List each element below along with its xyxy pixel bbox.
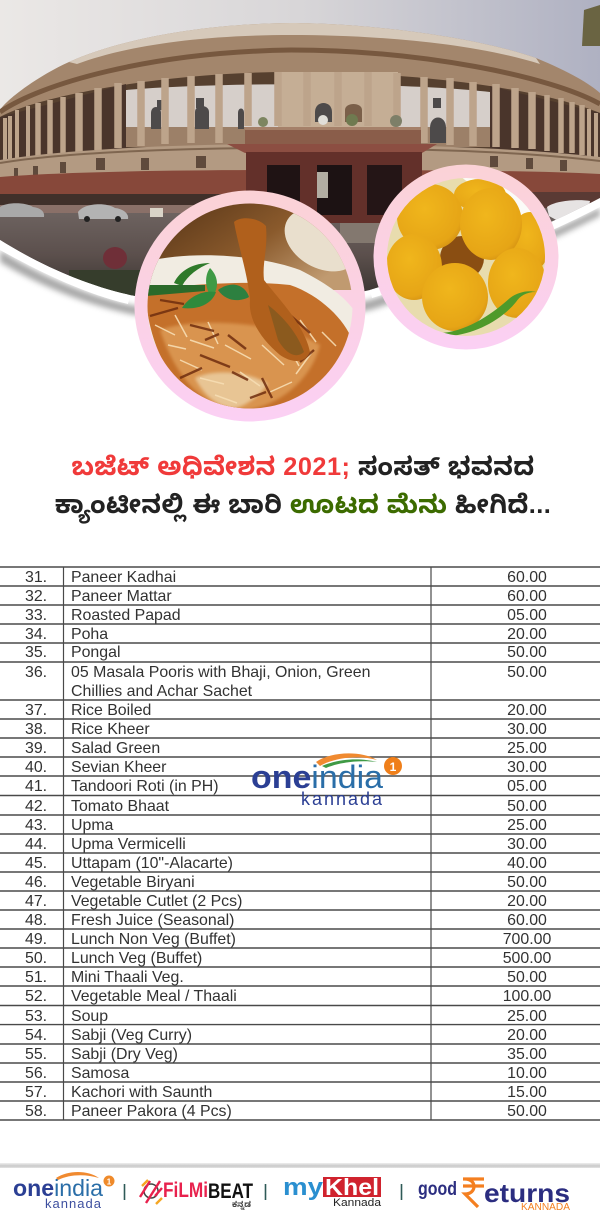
roadside sign	[150, 208, 163, 217]
chilli	[174, 263, 210, 286]
bowl background	[148, 204, 352, 290]
title line 2: ಕ್ಯಾಂಟೀನಲ್ಲಿ ಈ ಬಾರಿ ಊಟದ ಮೆನು ಹೀಗಿದೆ...	[55, 491, 551, 524]
serial numbers: 49.	[25, 931, 47, 948]
prices: 20.00	[507, 702, 547, 719]
title	[55, 453, 551, 524]
prices: 05.00	[507, 607, 547, 624]
tree top right	[582, 5, 600, 46]
chilli	[440, 291, 536, 336]
item names: Soup	[71, 1008, 108, 1025]
prices: 50.00	[507, 1103, 547, 1120]
menu price table	[0, 567, 600, 1120]
serial numbers: 54.	[25, 1027, 47, 1044]
prices: 20.00	[507, 893, 547, 910]
red sandstone base	[0, 170, 600, 208]
ground slab	[340, 223, 380, 243]
item names: Sabji (Dry Veg)	[71, 1046, 178, 1063]
serial numbers: 44.	[25, 836, 47, 853]
prices: 50.00	[507, 644, 547, 661]
serial numbers: 31.	[25, 569, 47, 586]
colonnade wall	[126, 84, 490, 128]
serial numbers: 46.	[25, 874, 47, 891]
prices: 15.00	[507, 1084, 547, 1101]
prices: 100.00	[503, 988, 551, 1005]
grass corner	[69, 270, 140, 296]
cornice and plinth	[0, 144, 600, 178]
prices: 50.00	[507, 969, 547, 986]
item names: Samosa	[71, 1065, 129, 1082]
item names: Lunch Veg (Buffet)	[71, 950, 202, 967]
serial numbers: 47.	[25, 893, 47, 910]
serial numbers: 33.	[25, 607, 47, 624]
prices: 30.00	[507, 721, 547, 738]
footer separators	[124, 1184, 402, 1200]
serial numbers: 55.	[25, 1046, 47, 1063]
footer bar	[0, 1163, 600, 1168]
prices: 20.00	[507, 1027, 547, 1044]
prices: 30.00	[507, 759, 547, 776]
balcony plants	[258, 117, 268, 127]
prices: 60.00	[507, 912, 547, 929]
item names: Salad Green	[71, 740, 160, 757]
serial numbers: 38.	[25, 721, 47, 738]
footer logo: mykhel: my	[283, 1174, 324, 1201]
footer logo: goodreturns: good	[418, 1179, 457, 1200]
colonnade columns	[5, 72, 596, 160]
serial numbers: 48.	[25, 912, 47, 929]
plate	[386, 177, 546, 337]
item names: Paneer Pakora (4 Pcs)	[71, 1103, 232, 1120]
rice strands	[155, 315, 336, 403]
sky	[0, 0, 600, 240]
photo: biryani circle	[134, 190, 371, 422]
serial numbers: 58.	[25, 1103, 47, 1120]
footer logo: oneindia	[13, 1172, 114, 1211]
serial numbers: 35.	[25, 644, 47, 661]
table grid	[0, 567, 600, 1120]
car left	[0, 203, 44, 217]
serial numbers: 39.	[25, 740, 47, 757]
prices: 10.00	[507, 1065, 547, 1082]
photo: bonda circle	[374, 164, 558, 350]
item names: Rice Kheer	[71, 721, 150, 738]
footer logo: filmibeat	[140, 1179, 253, 1211]
item names	[71, 569, 370, 1120]
item names: Fresh Juice (Seasonal)	[71, 912, 234, 929]
footer logo: filmibeat: BEAT	[208, 1180, 253, 1203]
side bowl	[284, 213, 346, 272]
item names: Tandoori Roti (in PH)	[71, 778, 218, 795]
prices: 500.00	[503, 950, 551, 967]
prices: 35.00	[507, 1046, 547, 1063]
footer logo: oneindia: 1	[107, 1178, 112, 1186]
watermark: oneindia kannada: oneindia	[251, 759, 383, 795]
prices: 40.00	[507, 855, 547, 872]
item names: Chillies and Achar Sachet	[71, 683, 253, 700]
item names: Pongal	[71, 644, 120, 661]
prices: 20.00	[507, 626, 547, 643]
car right	[547, 200, 590, 222]
prices: 25.00	[507, 740, 547, 757]
footer logo: mykhel	[283, 1174, 382, 1209]
hero: parliament photo	[0, 0, 600, 322]
footer logo: goodreturns: KANNADA	[521, 1202, 570, 1213]
item names: Sabji (Veg Curry)	[71, 1027, 192, 1044]
prices: 50.00	[507, 874, 547, 891]
serial numbers: 50.	[25, 950, 47, 967]
mint leaves	[206, 268, 217, 292]
footer logo: mykhel: Kannada	[333, 1197, 382, 1209]
item names: Paneer Mattar	[71, 588, 172, 605]
serial numbers: 40.	[25, 759, 47, 776]
prices: 50.00	[507, 798, 547, 815]
serial numbers	[25, 569, 47, 1120]
planter	[103, 247, 127, 269]
item names: Lunch Non Veg (Buffet)	[71, 931, 236, 948]
item names: Vegetable Cutlet (2 Pcs)	[71, 893, 242, 910]
white swoosh band	[0, 198, 600, 304]
footer logo: oneindia: kannada	[45, 1196, 102, 1211]
serial numbers: 51.	[25, 969, 47, 986]
watermark: oneindia kannada: kannada	[301, 789, 383, 809]
item names: Poha	[71, 626, 108, 643]
serial numbers: 56.	[25, 1065, 47, 1082]
serial numbers: 34.	[25, 626, 47, 643]
serial numbers: 42.	[25, 798, 47, 815]
serial numbers: 43.	[25, 817, 47, 834]
central bay	[278, 72, 398, 128]
chicken leg	[234, 218, 310, 361]
item names: Upma	[71, 817, 114, 834]
item names: Kachori with Saunth	[71, 1084, 212, 1101]
hedges and crowd	[0, 194, 228, 205]
item names: Tomato Bhaat	[71, 798, 170, 815]
item names: Upma Vermicelli	[71, 836, 186, 853]
item names: 05 Masala Pooris with Bhaji, Onion, Green	[71, 664, 370, 681]
central porch	[227, 114, 437, 223]
watermark: oneindia kannada	[251, 753, 402, 809]
item names: Vegetable Meal / Thaali	[71, 988, 237, 1005]
item names: Uttapam (10"-Alacarte)	[71, 855, 233, 872]
serial numbers: 45.	[25, 855, 47, 872]
swoosh shadow	[0, 208, 600, 322]
dark wing shadows	[0, 84, 600, 162]
serial numbers: 36.	[25, 664, 47, 681]
serial numbers: 57.	[25, 1084, 47, 1101]
item names: Mini Thaali Veg.	[71, 969, 184, 986]
item names: Sevian Kheer	[71, 759, 167, 776]
watermark: oneindia kannada: 1	[390, 760, 397, 774]
serial numbers: 32.	[25, 588, 47, 605]
prices: 25.00	[507, 817, 547, 834]
item names: Vegetable Biryani	[71, 874, 195, 891]
prices: 700.00	[503, 931, 551, 948]
window arches	[151, 98, 446, 143]
dark gap	[440, 236, 484, 273]
item names: Paneer Kadhai	[71, 569, 176, 586]
bonda pieces	[454, 179, 506, 208]
prices: 50.00	[507, 664, 547, 681]
plate	[140, 255, 360, 345]
serial numbers: 41.	[25, 778, 47, 795]
prices: 05.00	[507, 778, 547, 795]
prices: 60.00	[507, 588, 547, 605]
footer logo: goodreturns	[418, 1178, 570, 1213]
building drum and roof	[0, 23, 600, 160]
serial numbers: 53.	[25, 1008, 47, 1025]
rupee symbol	[463, 1179, 484, 1207]
footer logo: filmibeat: FiLMi	[163, 1179, 208, 1202]
road	[0, 208, 580, 296]
footer logo: mykhel: Khel	[325, 1174, 379, 1200]
footer logo: filmibeat: ಕನ್ನಡ	[232, 1200, 251, 1211]
car center	[78, 204, 128, 219]
prices	[503, 569, 551, 1120]
prices: 25.00	[507, 1008, 547, 1025]
item names: Rice Boiled	[71, 702, 151, 719]
title line 1: ಬಜೆಟ್ ಅಧಿವೇಶನ 2021; ಸಂಸತ್ ಭವನದ	[71, 453, 535, 481]
serial numbers: 37.	[25, 702, 47, 719]
footer logo: goodreturns: eturns	[484, 1178, 570, 1208]
serial numbers: 52.	[25, 988, 47, 1005]
prices: 60.00	[507, 569, 547, 586]
footer logo: oneindia: oneindia	[13, 1175, 103, 1201]
prices: 30.00	[507, 836, 547, 853]
rice mound	[145, 283, 352, 415]
item names: Roasted Papad	[71, 607, 181, 624]
